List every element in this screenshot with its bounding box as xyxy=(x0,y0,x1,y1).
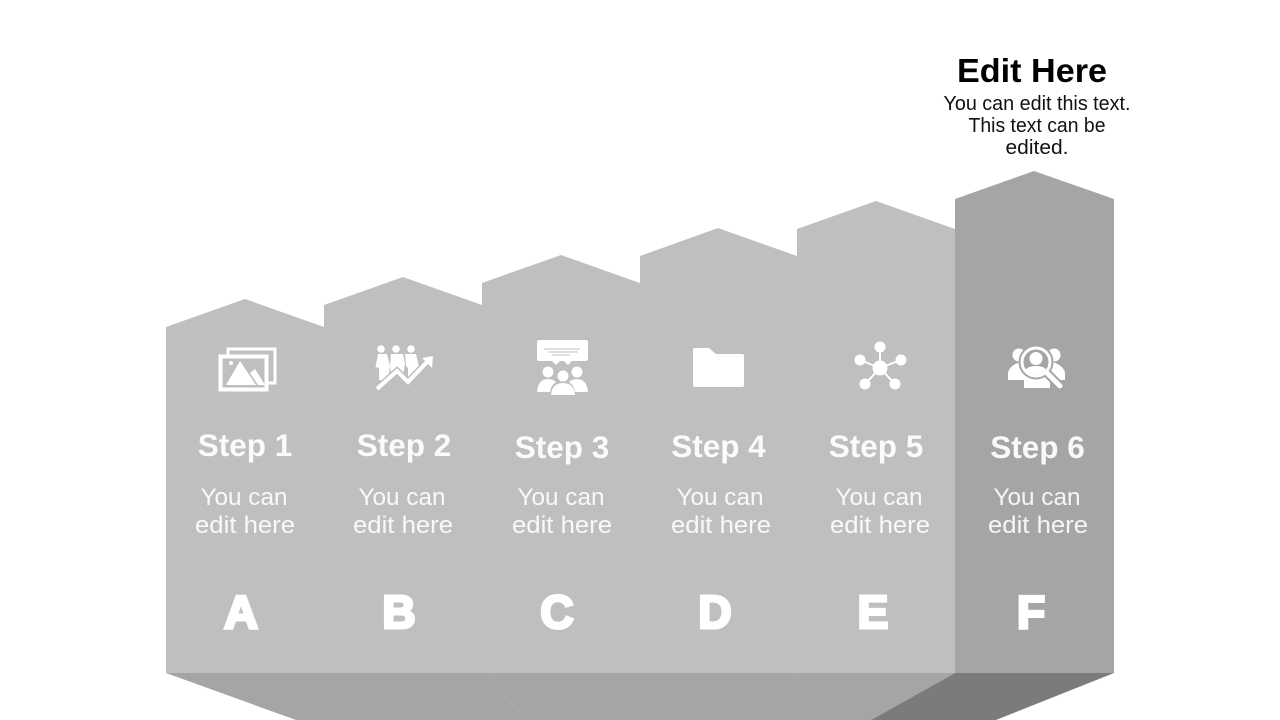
letter E: E xyxy=(858,586,888,638)
panel: steps 1 to 5 xyxy=(166,201,955,673)
step 2 text: Step 2 xyxy=(357,427,451,463)
step 2 text: You can xyxy=(358,484,446,511)
step 3 text: Step 3 xyxy=(515,429,609,465)
panel: step 6 highlighted xyxy=(955,171,1114,673)
step 4 text xyxy=(671,428,771,539)
step 1 text: edit here xyxy=(195,512,295,539)
letter B: B xyxy=(382,586,416,638)
icon: people and growth arrow xyxy=(376,345,433,389)
step 6 text: You can xyxy=(994,484,1080,511)
step 2 text: edit here xyxy=(353,512,453,539)
step 4 text: You can xyxy=(676,484,764,511)
text block: edit description xyxy=(944,93,1130,159)
step 6 text: Step 6 xyxy=(990,429,1085,465)
step 3 text: edit here xyxy=(512,512,612,539)
step 5 text: You can xyxy=(836,484,922,511)
step 3 text xyxy=(512,429,612,539)
step 5 text xyxy=(829,428,930,539)
icon: picture frames xyxy=(220,349,275,390)
letter C: C xyxy=(540,586,574,638)
text block: edit description: This text can be xyxy=(968,115,1106,137)
letter A: A xyxy=(224,586,258,638)
icon: folder xyxy=(693,348,744,387)
letter F: F xyxy=(1017,586,1045,638)
icon: speech bubble over group xyxy=(537,340,588,395)
step 2 text xyxy=(353,427,453,539)
step 1 text: Step 1 xyxy=(198,427,292,463)
step 1 text: You can xyxy=(200,484,288,511)
step 3 text: You can xyxy=(518,484,604,511)
letter D: D xyxy=(698,586,732,638)
step 6 text xyxy=(988,429,1088,539)
floor: dark plane under step 6 xyxy=(871,673,1114,720)
step 5 text: Step 5 xyxy=(829,428,923,464)
step 6 text: edit here xyxy=(988,512,1088,539)
floor: lower shadow plane xyxy=(166,673,955,720)
heading: Edit Here: Edit Here xyxy=(957,52,1107,89)
step 4 text: Step 4 xyxy=(671,428,766,464)
step 4 text: edit here xyxy=(671,512,771,539)
icon: people under magnifier xyxy=(1008,344,1065,388)
text block: edit description: edited. xyxy=(1006,137,1068,159)
icon: network hub xyxy=(856,342,906,388)
step 5 text: edit here xyxy=(830,512,930,539)
step 1 text xyxy=(195,427,295,539)
text block: edit description: You can edit this text. xyxy=(944,93,1130,115)
